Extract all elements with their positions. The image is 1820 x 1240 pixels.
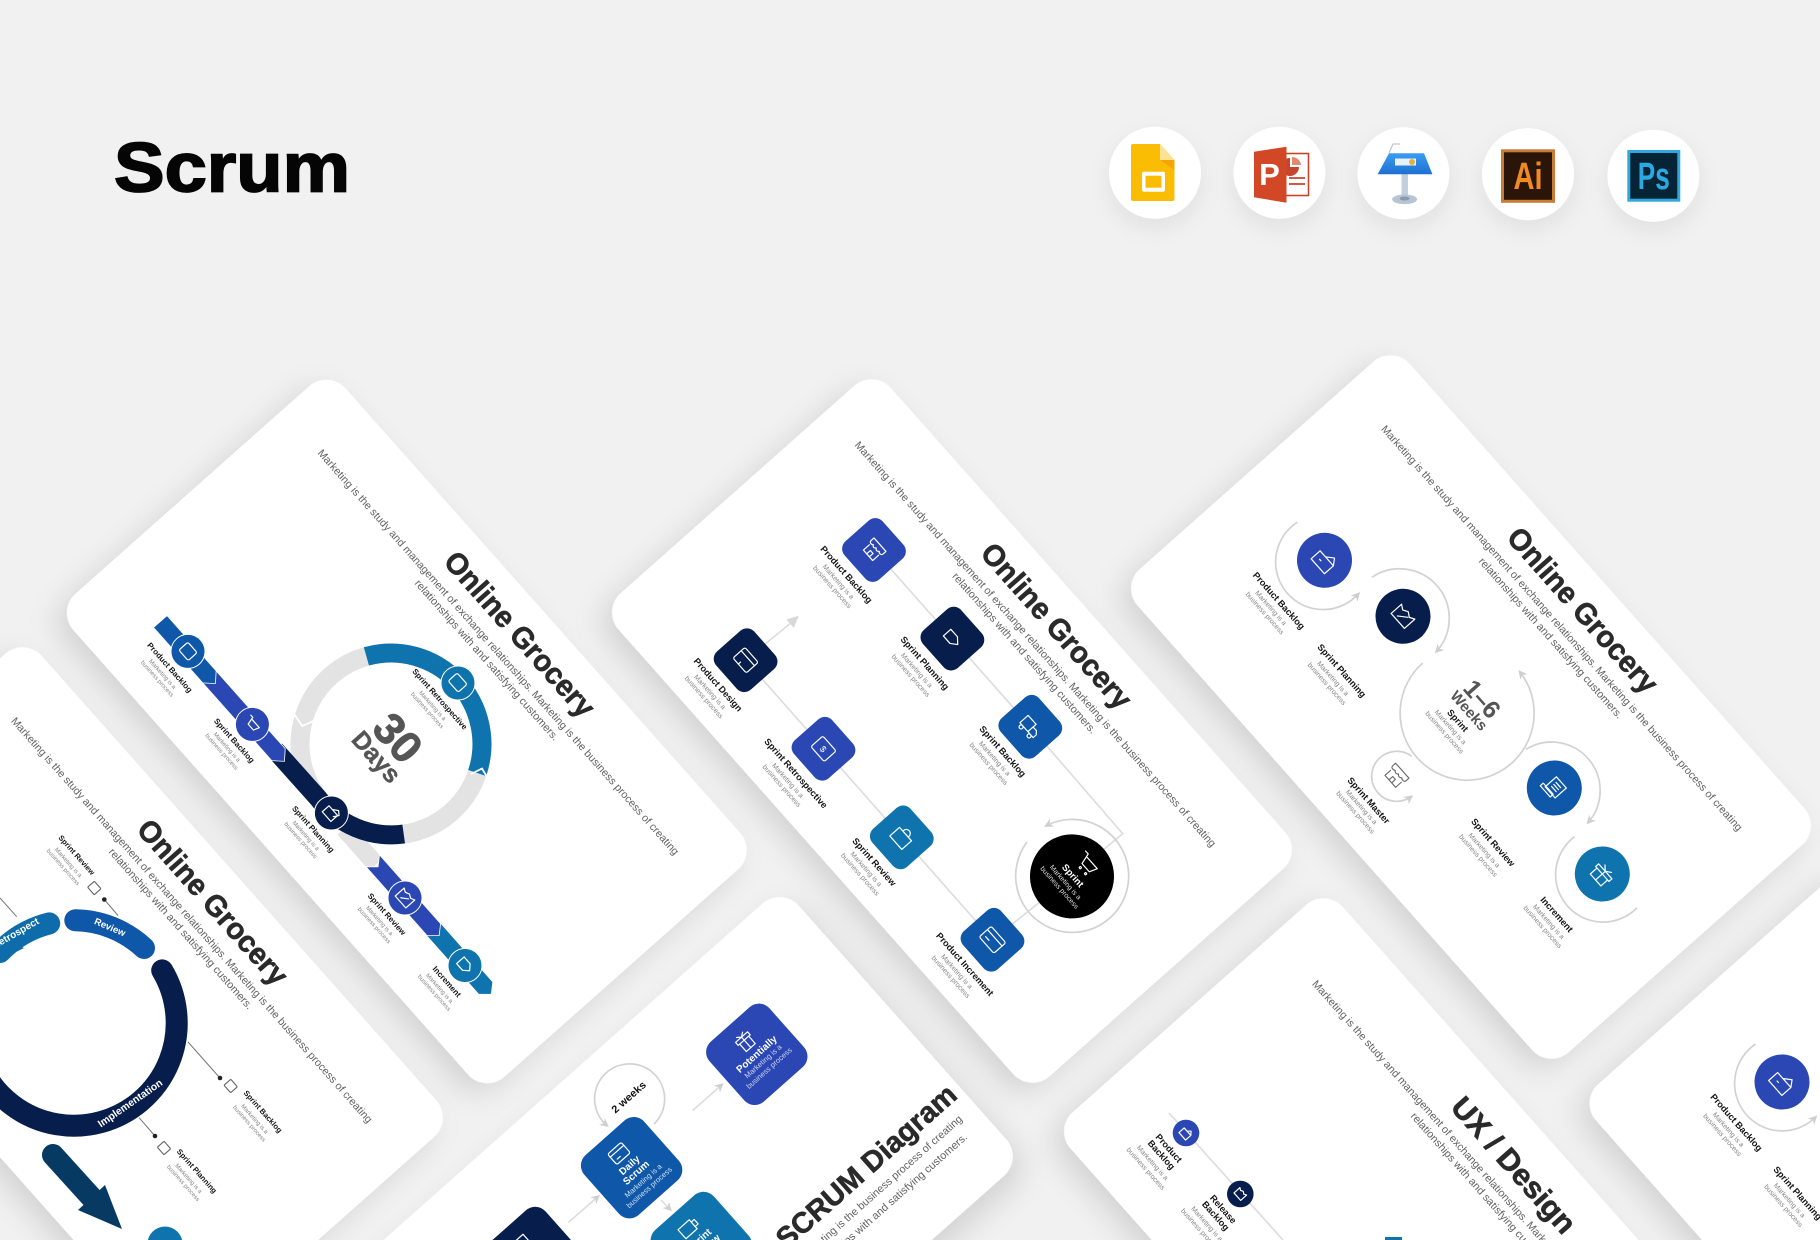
node: sprint review bbox=[837, 798, 942, 901]
arrows bbox=[568, 1084, 722, 1222]
node: sprint backlog: business process bbox=[967, 742, 1009, 787]
node: release backlog: Release bbox=[1208, 1193, 1238, 1226]
node: potentially: business process bbox=[744, 1045, 794, 1091]
card background bbox=[1120, 345, 1820, 1069]
ring chart bbox=[294, 653, 488, 835]
center label: Marketing is a bbox=[1433, 709, 1467, 746]
node: product increment: Marketing is a bbox=[939, 953, 973, 991]
node: increment: Marketing is a bbox=[424, 973, 454, 1005]
node: sprint retrospective: Sprint Retrospective bbox=[762, 736, 829, 810]
item: sprint backlog: Marketing is a bbox=[239, 1104, 269, 1136]
node: sprint review: Marketing is a bbox=[848, 851, 883, 888]
node: sprint review bbox=[354, 867, 436, 948]
item: sprint planning: business process bbox=[165, 1164, 200, 1203]
connectors bbox=[0, 897, 222, 1138]
heading: Online Grocery bbox=[1500, 521, 1664, 700]
node: product backlog: Backlog bbox=[1146, 1138, 1177, 1172]
card background bbox=[1053, 888, 1755, 1240]
node: product backlog bbox=[1237, 515, 1369, 643]
arrow bbox=[53, 1155, 122, 1229]
arc: review: Review bbox=[92, 916, 127, 939]
icon: powerpoint: P bbox=[1259, 157, 1280, 192]
node: sprint backlog: Marketing is a bbox=[212, 732, 241, 764]
node: sprint retrospective bbox=[398, 642, 497, 743]
node: sprint retrospective: Marketing is a bbox=[417, 690, 447, 723]
node: sprint review: business process bbox=[1457, 834, 1499, 879]
node: sprint retrospective: business process bbox=[761, 764, 802, 809]
node: product backlog bbox=[1125, 1104, 1214, 1192]
label: sprint planning: business process bbox=[1762, 1184, 1804, 1229]
node: increment bbox=[1521, 835, 1641, 950]
node: product backlog: Product bbox=[1154, 1132, 1184, 1165]
node: daily scrum: business process bbox=[625, 1165, 674, 1210]
arc: implementation bbox=[0, 970, 177, 1130]
description: Marketing is the study and management of exchange relationships. Marketing is the business process of creating bbox=[852, 439, 1218, 850]
node: sprint bbox=[1013, 817, 1131, 936]
node: sprint review bbox=[645, 1186, 758, 1240]
heading: UX / Design bbox=[1444, 1091, 1582, 1240]
label: sprint planning bbox=[1758, 1164, 1820, 1234]
node: daily scrum bbox=[575, 1111, 688, 1224]
center label: 30 days bbox=[346, 700, 436, 789]
card background bbox=[601, 369, 1303, 1093]
item: sprint review: Sprint Review bbox=[57, 833, 97, 877]
node: increment: Increment bbox=[431, 964, 463, 999]
node: sprint review: Marketing is a bbox=[364, 905, 394, 938]
node: sprint review: Marketing is a bbox=[1467, 832, 1501, 869]
icon: photoshop: Ps bbox=[1638, 156, 1670, 198]
node: sprint retrospective: Marketing is a bbox=[770, 762, 804, 800]
node: sprint review: Sprint Review bbox=[1469, 816, 1517, 869]
node: potentially bbox=[700, 998, 813, 1111]
node: daily scrum: Daily bbox=[617, 1153, 643, 1178]
node: product backlog: Product Backlog bbox=[1251, 570, 1307, 631]
description: relationships with and satisfying customers. bbox=[106, 846, 255, 1012]
node: product design: business process bbox=[683, 675, 724, 721]
center label: 30 days: 30 bbox=[363, 704, 432, 773]
node: sprint backlog: Marketing is a bbox=[977, 740, 1011, 778]
node: release backlog: Backlog bbox=[1200, 1199, 1231, 1233]
card background bbox=[299, 886, 1023, 1240]
node: sprint backlog: Sprint Backlog bbox=[212, 717, 256, 765]
bottom node bbox=[148, 1226, 182, 1240]
icon: keynote bbox=[1357, 127, 1449, 219]
node: sprint planning: Sprint Planning bbox=[1315, 642, 1368, 699]
heading: Online Grocery bbox=[130, 813, 294, 992]
node: potentially: Marketing is a bbox=[743, 1042, 784, 1080]
description: relationships with and satisfying customers. bbox=[1476, 556, 1625, 721]
node: sprint planning: Sprint Planning bbox=[898, 634, 951, 692]
node: product backlog: Marketing is a bbox=[1253, 590, 1287, 627]
node: sprint retrospective bbox=[749, 698, 872, 822]
node: sprint review: Sprint Review bbox=[366, 891, 408, 938]
node: sprint: Marketing is a bbox=[1048, 864, 1082, 901]
icon: photoshop bbox=[1607, 130, 1699, 222]
connectors bbox=[746, 550, 1123, 940]
node: sprint master: Sprint Master bbox=[1345, 775, 1392, 826]
node: sprint review: business process bbox=[839, 852, 880, 898]
node: sprint retrospective: Sprint Retrospective bbox=[410, 667, 469, 732]
node: increment: Increment bbox=[1538, 895, 1575, 934]
node: product backlog bbox=[805, 506, 917, 617]
node: product backlog: Marketing is a bbox=[147, 659, 177, 691]
timeline line bbox=[1169, 1113, 1283, 1240]
arc: retrospect bbox=[0, 916, 49, 962]
node: sprint review bbox=[1455, 747, 1596, 882]
panel: scrum diagram bbox=[299, 886, 1023, 1240]
description: Marketing is the study and management of exchange relationships. Marketing is the business process of creating bbox=[1378, 423, 1744, 834]
icon: illustrator: Ai bbox=[1514, 156, 1542, 198]
node: release backlog bbox=[1179, 1165, 1269, 1240]
node: product backlog: business process bbox=[1125, 1147, 1166, 1192]
node: product backlog: Product Backlog bbox=[818, 544, 874, 605]
description: Marketing is the study and management of exchange relationships. Marketing is the business process of creating bbox=[315, 447, 681, 858]
heading: Online Grocery bbox=[974, 537, 1138, 716]
arc: review bbox=[75, 916, 144, 948]
node: sprint planning bbox=[278, 780, 364, 865]
node: sprint planning: Marketing is a bbox=[291, 820, 320, 853]
node: sprint retrospective: business process bbox=[409, 692, 444, 730]
node: product backlog: business process bbox=[1701, 1113, 1743, 1158]
item: sprint planning: Sprint Planning bbox=[175, 1147, 219, 1195]
label: sprint planning: Marketing is a bbox=[1772, 1182, 1806, 1220]
icon: illustrator bbox=[1482, 128, 1574, 220]
item: sprint review: Marketing is a bbox=[53, 847, 83, 879]
item: sprint review bbox=[44, 833, 101, 895]
center label: Sprint bbox=[1445, 707, 1470, 734]
center label: business process bbox=[1423, 710, 1465, 756]
node: daily scrum: Scrum bbox=[621, 1159, 652, 1188]
node: sprint planning: business process bbox=[1306, 662, 1347, 707]
ribbon timeline bbox=[154, 616, 498, 1000]
node: sprint planning: business process bbox=[890, 654, 931, 699]
center label: 30 days: Days bbox=[346, 726, 406, 789]
arc: implementation: Implementation bbox=[96, 1077, 165, 1130]
heading: Online Grocery bbox=[437, 545, 601, 724]
node: sprint review: business process bbox=[356, 907, 391, 945]
panel: online grocery cycle bbox=[1120, 345, 1820, 1069]
node: sprint master bbox=[1333, 749, 1422, 837]
node: product backlog bbox=[133, 616, 222, 705]
item: sprint backlog bbox=[224, 1079, 284, 1146]
node: sprint planning: Sprint Planning bbox=[290, 804, 336, 854]
node: sprint backlog: business process bbox=[203, 733, 239, 772]
icon: powerpoint bbox=[1233, 127, 1325, 219]
node: increment: business process bbox=[416, 974, 451, 1013]
panel: online grocery flow bbox=[601, 369, 1303, 1093]
panel: online grocery sprint ring bbox=[0, 637, 454, 1240]
node: sprint backlog bbox=[200, 692, 284, 775]
partial node bbox=[1385, 1237, 1402, 1240]
description: relationships with and satisfying customers. bbox=[412, 578, 561, 743]
node: daily scrum: Marketing is a bbox=[623, 1161, 664, 1200]
panel: ux design bbox=[1053, 888, 1755, 1240]
node: product backlog: Marketing is a bbox=[1135, 1145, 1169, 1182]
node: product backlog bbox=[477, 1201, 589, 1240]
node: product backlog: Product Backlog bbox=[1708, 1092, 1764, 1153]
sprint ring arrow bbox=[1016, 819, 1129, 932]
node: sprint retrospective: $ bbox=[818, 744, 829, 754]
node: increment: Marketing is a bbox=[1531, 904, 1565, 941]
node: sprint planning: business process bbox=[282, 822, 318, 860]
node: product backlog: business process bbox=[1244, 591, 1285, 637]
node: sprint review: Sprint Review bbox=[850, 836, 899, 889]
description: relationships with and satisfying customers. bbox=[949, 571, 1099, 736]
node: product increment: Product Increment bbox=[934, 931, 996, 998]
node: sprint master: business process bbox=[1334, 790, 1376, 836]
node: increment: business process bbox=[1522, 905, 1563, 950]
node: sprint: Sprint bbox=[1059, 862, 1086, 891]
item: sprint planning bbox=[157, 1141, 219, 1207]
center label bbox=[1423, 670, 1510, 756]
card background bbox=[56, 369, 757, 1094]
panel: online grocery 30 days bbox=[56, 369, 757, 1094]
icon: google slides bbox=[1109, 127, 1201, 219]
description: Marketing is the study and management of exchange relationships. Marketing is the business process of creating bbox=[8, 715, 374, 1126]
node: sprint backlog: Sprint Backlog bbox=[977, 724, 1028, 779]
node: product backlog: business process bbox=[811, 565, 853, 610]
item: sprint backlog: business process bbox=[231, 1105, 266, 1144]
node: product design bbox=[678, 618, 787, 726]
node: product increment bbox=[921, 893, 1039, 1010]
node: product increment: business process bbox=[930, 955, 971, 1000]
cycle arcs bbox=[1276, 522, 1637, 922]
cycle arc bbox=[1735, 1044, 1816, 1131]
node: sprint planning bbox=[885, 596, 994, 704]
center label: Weeks bbox=[1447, 688, 1491, 734]
node: sprint master: Marketing is a bbox=[1344, 789, 1378, 826]
item: sprint planning: Marketing is a bbox=[173, 1163, 203, 1195]
card background bbox=[0, 637, 454, 1240]
node: product backlog: Marketing is a bbox=[821, 564, 855, 601]
node: product backlog: Marketing is a bbox=[1711, 1112, 1745, 1149]
panel: right cycle bbox=[1579, 860, 1820, 1240]
item: sprint backlog: Sprint Backlog bbox=[242, 1089, 284, 1135]
node: product design: Product Design bbox=[692, 656, 744, 714]
node: sprint planning bbox=[1301, 573, 1446, 712]
node: sprint backlog bbox=[964, 686, 1071, 791]
node: sprint planning: Marketing is a bbox=[1315, 660, 1349, 698]
title: Scrum bbox=[114, 128, 350, 206]
node: increment bbox=[416, 937, 493, 1013]
node: product backlog: business process bbox=[139, 660, 174, 699]
item: sprint review: business process bbox=[45, 848, 80, 887]
node: product design: Marketing is a bbox=[692, 674, 726, 711]
node: sprint planning: Marketing is a bbox=[899, 652, 933, 689]
node: sprint: business process bbox=[1038, 865, 1080, 911]
node: potentially: Potentially bbox=[735, 1033, 780, 1076]
card background bbox=[1579, 860, 1820, 1240]
node: product backlog bbox=[1695, 1036, 1820, 1165]
two week loop: 2 weeks bbox=[609, 1079, 649, 1116]
node: product backlog: Product Backlog bbox=[145, 641, 194, 695]
center label: 1–6 bbox=[1457, 675, 1506, 724]
two week loop bbox=[595, 1064, 665, 1126]
